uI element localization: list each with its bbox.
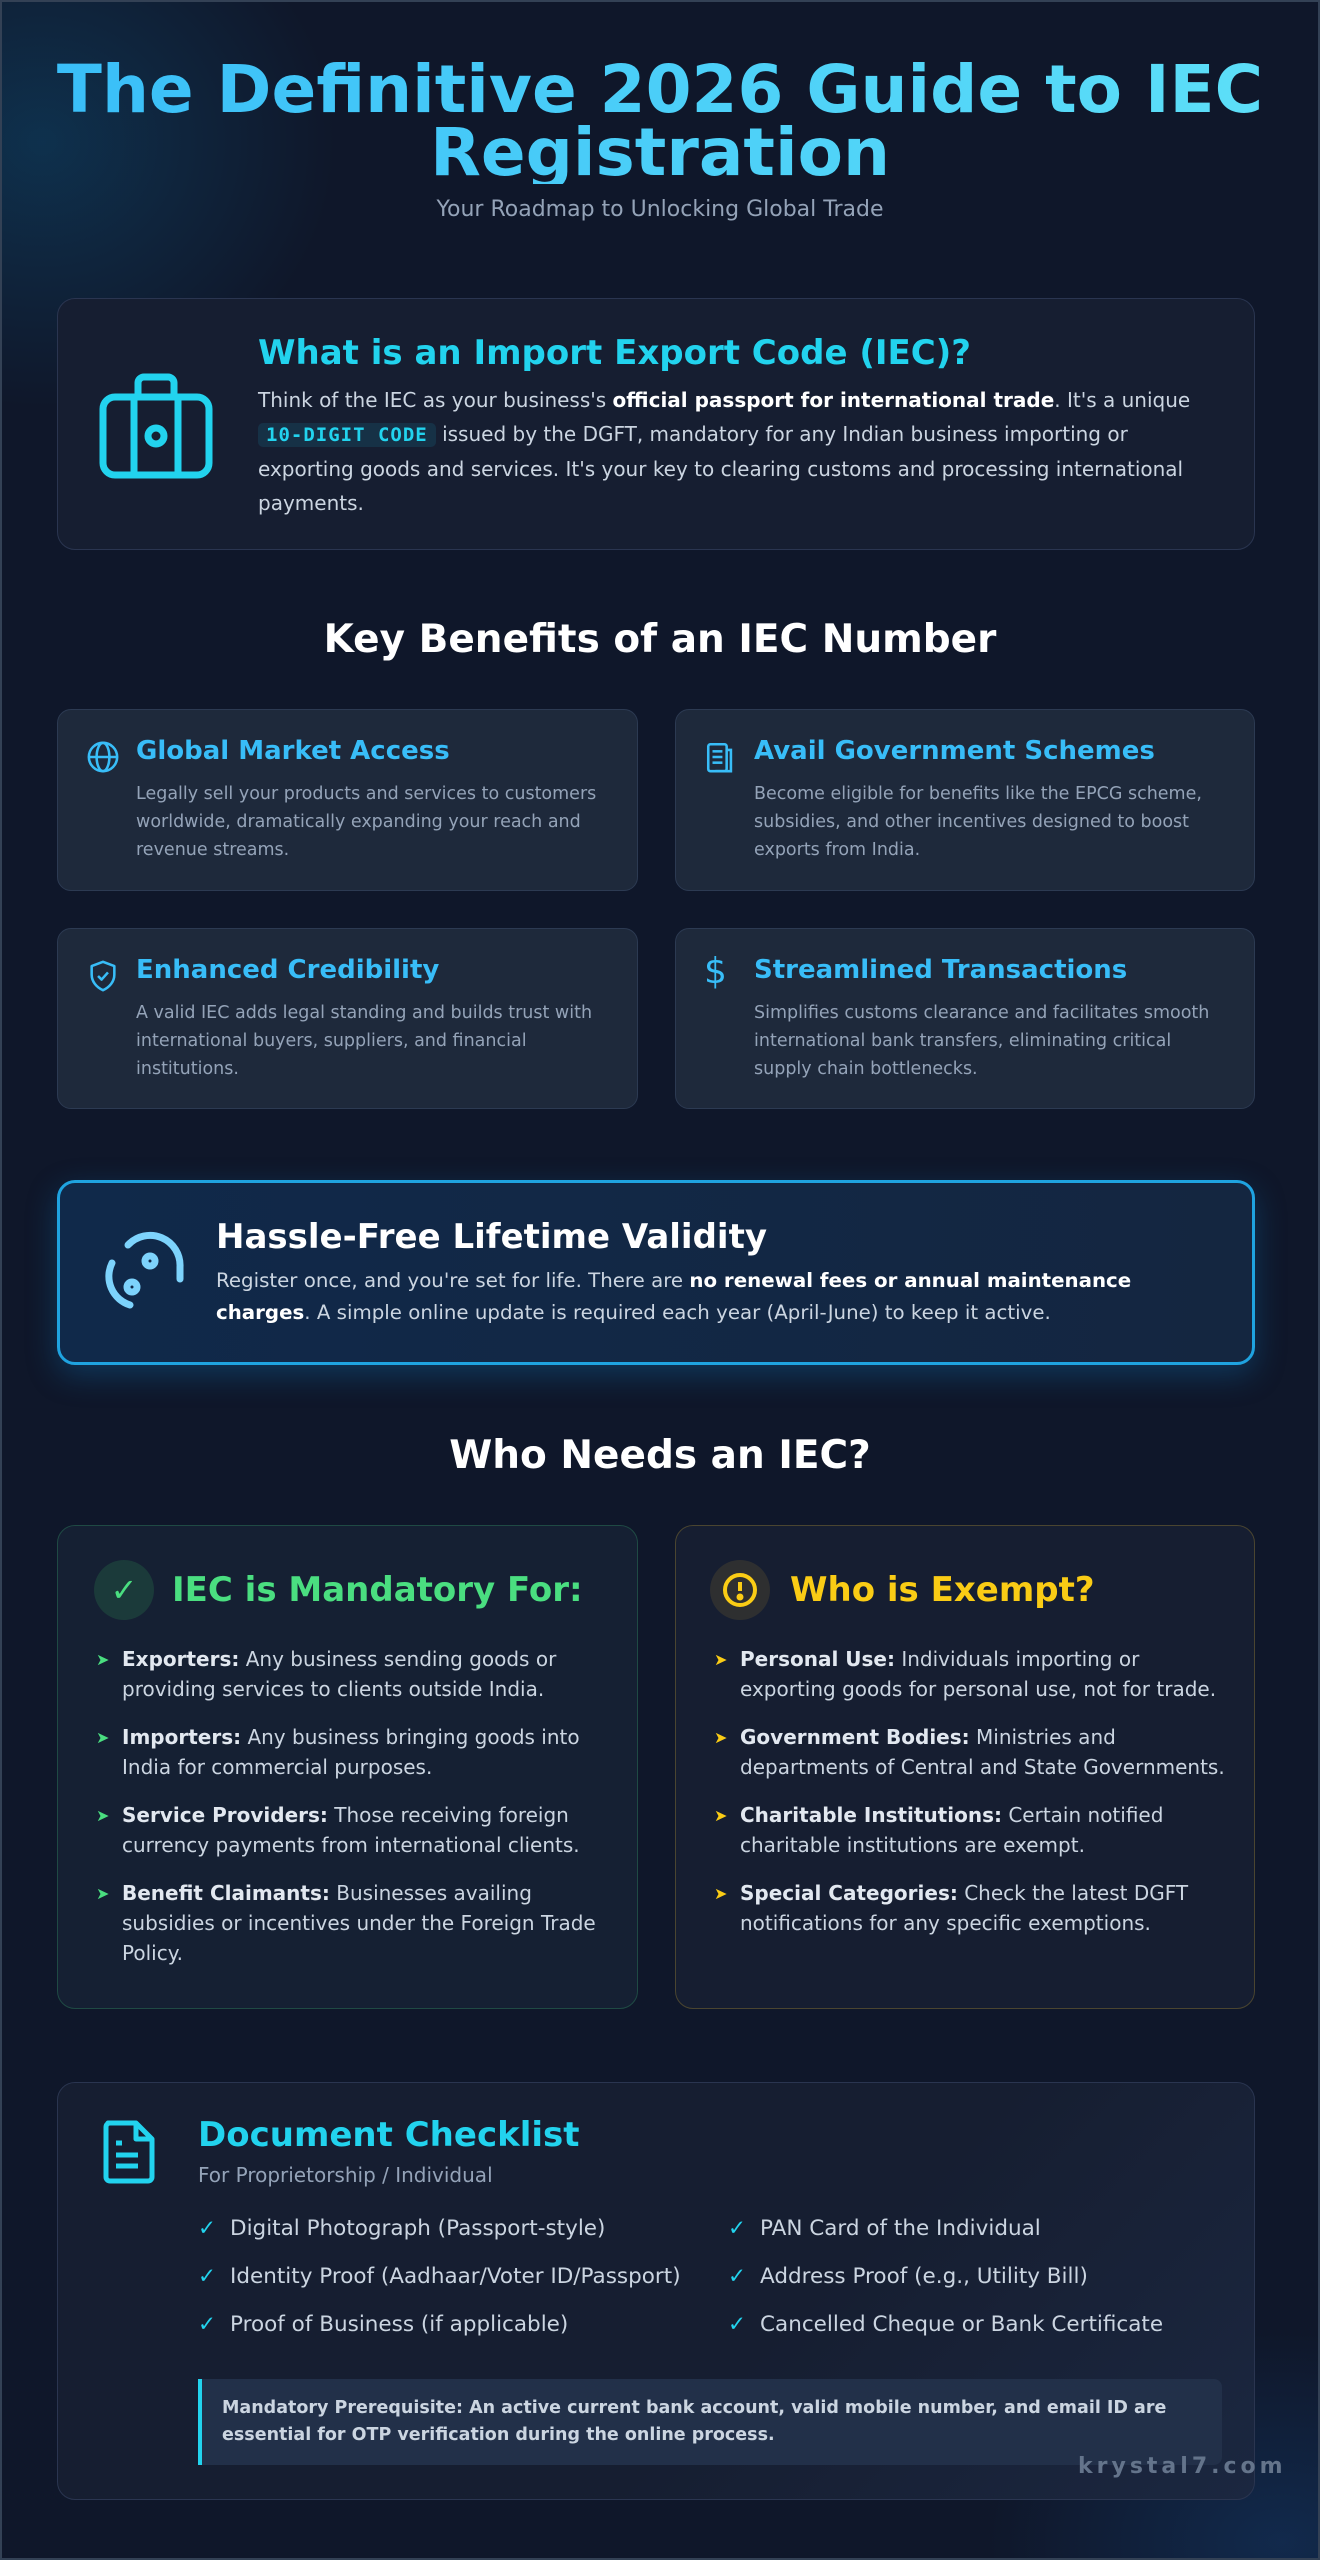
footer: brand: krystal7.com — [1078, 2454, 1287, 2479]
panel: government schemes — [675, 709, 1255, 891]
heading: What is an Import Export Code (IEC)? — [258, 333, 971, 373]
list: Government Bodies: Ministries and departments of Central and State Governments. — [740, 1725, 1225, 1779]
panel: streamlined transactions: Streamlined Transactions — [754, 955, 1127, 985]
heading: Hassle-Free Lifetime Validity — [216, 1217, 767, 1257]
list: Personal Use: Individuals importing or exporting goods for personal use, not for trade. — [740, 1647, 1216, 1701]
panel: government schemes: Avail Government Schemes — [754, 736, 1155, 766]
panel: government schemes: Become eligible for benefits like the EPCG scheme, subsidies, and other incentives designed to boost exports from India. — [754, 784, 1202, 860]
list: ➤ — [96, 1806, 109, 1825]
list: Exporters: Any business sending goods or providing services to clients outside India. — [122, 1647, 556, 1701]
checklist items — [198, 2216, 1163, 2337]
panel: mandatory — [57, 1525, 638, 2009]
title: The Definitive 2026 Guide to IEC — [57, 51, 1263, 128]
icon: file — [104, 2120, 154, 2184]
heading: IEC is Mandatory For: — [172, 1570, 583, 1610]
icon: check circle: ✓ — [111, 1571, 137, 1609]
panel: global market access — [57, 709, 638, 891]
icon: dollar: $ — [704, 951, 727, 992]
list: Importers: Any business bringing goods into India for commercial purposes. — [122, 1725, 580, 1779]
title — [2, 58, 1318, 184]
icon: refresh — [105, 1232, 184, 1308]
icon: suitcase — [100, 374, 212, 478]
list: Special Categories: Check the latest DGFT notifications for any specific exemptions. — [740, 1881, 1188, 1935]
list: ➤ — [96, 1728, 109, 1747]
panel: document checklist — [57, 2082, 1255, 2500]
checklist items: ✓ Digital Photograph (Passport-style) — [198, 2216, 605, 2241]
body text: Think of the IEC as your business's official passport for international trade. It's a unique 10-DIGIT CODE issued by the DGFT, mandatory for any Indian business importing or exporting goods and services. It's your key to clearing customs and processing international payments. — [258, 388, 1190, 515]
list: Charitable Institutions: Certain notified charitable institutions are exempt. — [740, 1803, 1163, 1857]
list — [714, 1647, 1225, 1935]
list: ➤ — [714, 1806, 727, 1825]
list — [96, 1647, 596, 1965]
checklist items: ✓ Cancelled Cheque or Bank Certificate — [728, 2312, 1163, 2337]
panel: lifetime validity — [57, 1180, 1255, 1365]
heading: Who is Exempt? — [790, 1570, 1095, 1610]
subtitle: For Proprietorship / Individual — [198, 2163, 493, 2187]
icon: check circle — [94, 1560, 154, 1620]
checklist items: ✓ Proof of Business (if applicable) — [198, 2312, 568, 2337]
checklist items: ✓ Identity Proof (Aadhaar/Voter ID/Passport) — [198, 2264, 681, 2289]
heading: Document Checklist — [198, 2115, 580, 2155]
heading: who needs: Who Needs an IEC? — [449, 1433, 871, 1478]
body text: Register once, and you're set for life. There are no renewal fees or annual maintenance charges. A simple online update is required each year (April-June) to keep it active. — [216, 1269, 1131, 1324]
list: Benefit Claimants: Businesses availing subsidies or incentives under the Foreign Trade Policy. — [122, 1881, 596, 1965]
callout: prerequisite: Mandatory Prerequisite: An active current bank account, valid mobile number, and email ID are essential for OTP verification during the online process. — [222, 2398, 1166, 2445]
list: ➤ — [714, 1728, 727, 1747]
panel: global market access: Global Market Access — [136, 736, 450, 766]
subtitle: Your Roadmap to Unlocking Global Trade — [436, 197, 883, 222]
panel: enhanced credibility: A valid IEC adds legal standing and builds trust with international buyers, suppliers, and financial institutions. — [136, 1003, 592, 1079]
callout: prerequisite — [198, 2379, 1222, 2465]
panel: enhanced credibility: Enhanced Credibility — [136, 955, 439, 985]
panel: exempt — [675, 1525, 1255, 2009]
checklist items: ✓ PAN Card of the Individual — [728, 2216, 1041, 2241]
list: ➤ — [714, 1884, 727, 1903]
panel: streamlined transactions: Simplifies customs clearance and facilitates smooth international bank transfers, eliminating critical supply chain bottlenecks. — [754, 1003, 1209, 1079]
title: Registration — [430, 114, 890, 191]
icon: globe — [88, 742, 118, 772]
icon: document — [706, 743, 732, 772]
list: ➤ — [714, 1650, 727, 1669]
icon: alert circle — [710, 1560, 770, 1620]
heading: key benefits: Key Benefits of an IEC Number — [324, 617, 996, 662]
icon: shield — [90, 960, 116, 992]
panel: global market access: Legally sell your products and services to customers worldwide, dramatically expanding your reach and revenue streams. — [136, 784, 596, 860]
panel: what is IEC — [57, 298, 1255, 550]
list: Service Providers: Those receiving foreign currency payments from international clients. — [122, 1803, 580, 1857]
checklist items: ✓ Address Proof (e.g., Utility Bill) — [728, 2264, 1088, 2289]
list: ➤ — [96, 1650, 109, 1669]
panel: streamlined transactions — [675, 928, 1255, 1109]
list: ➤ — [96, 1884, 109, 1903]
panel: enhanced credibility — [57, 928, 638, 1109]
